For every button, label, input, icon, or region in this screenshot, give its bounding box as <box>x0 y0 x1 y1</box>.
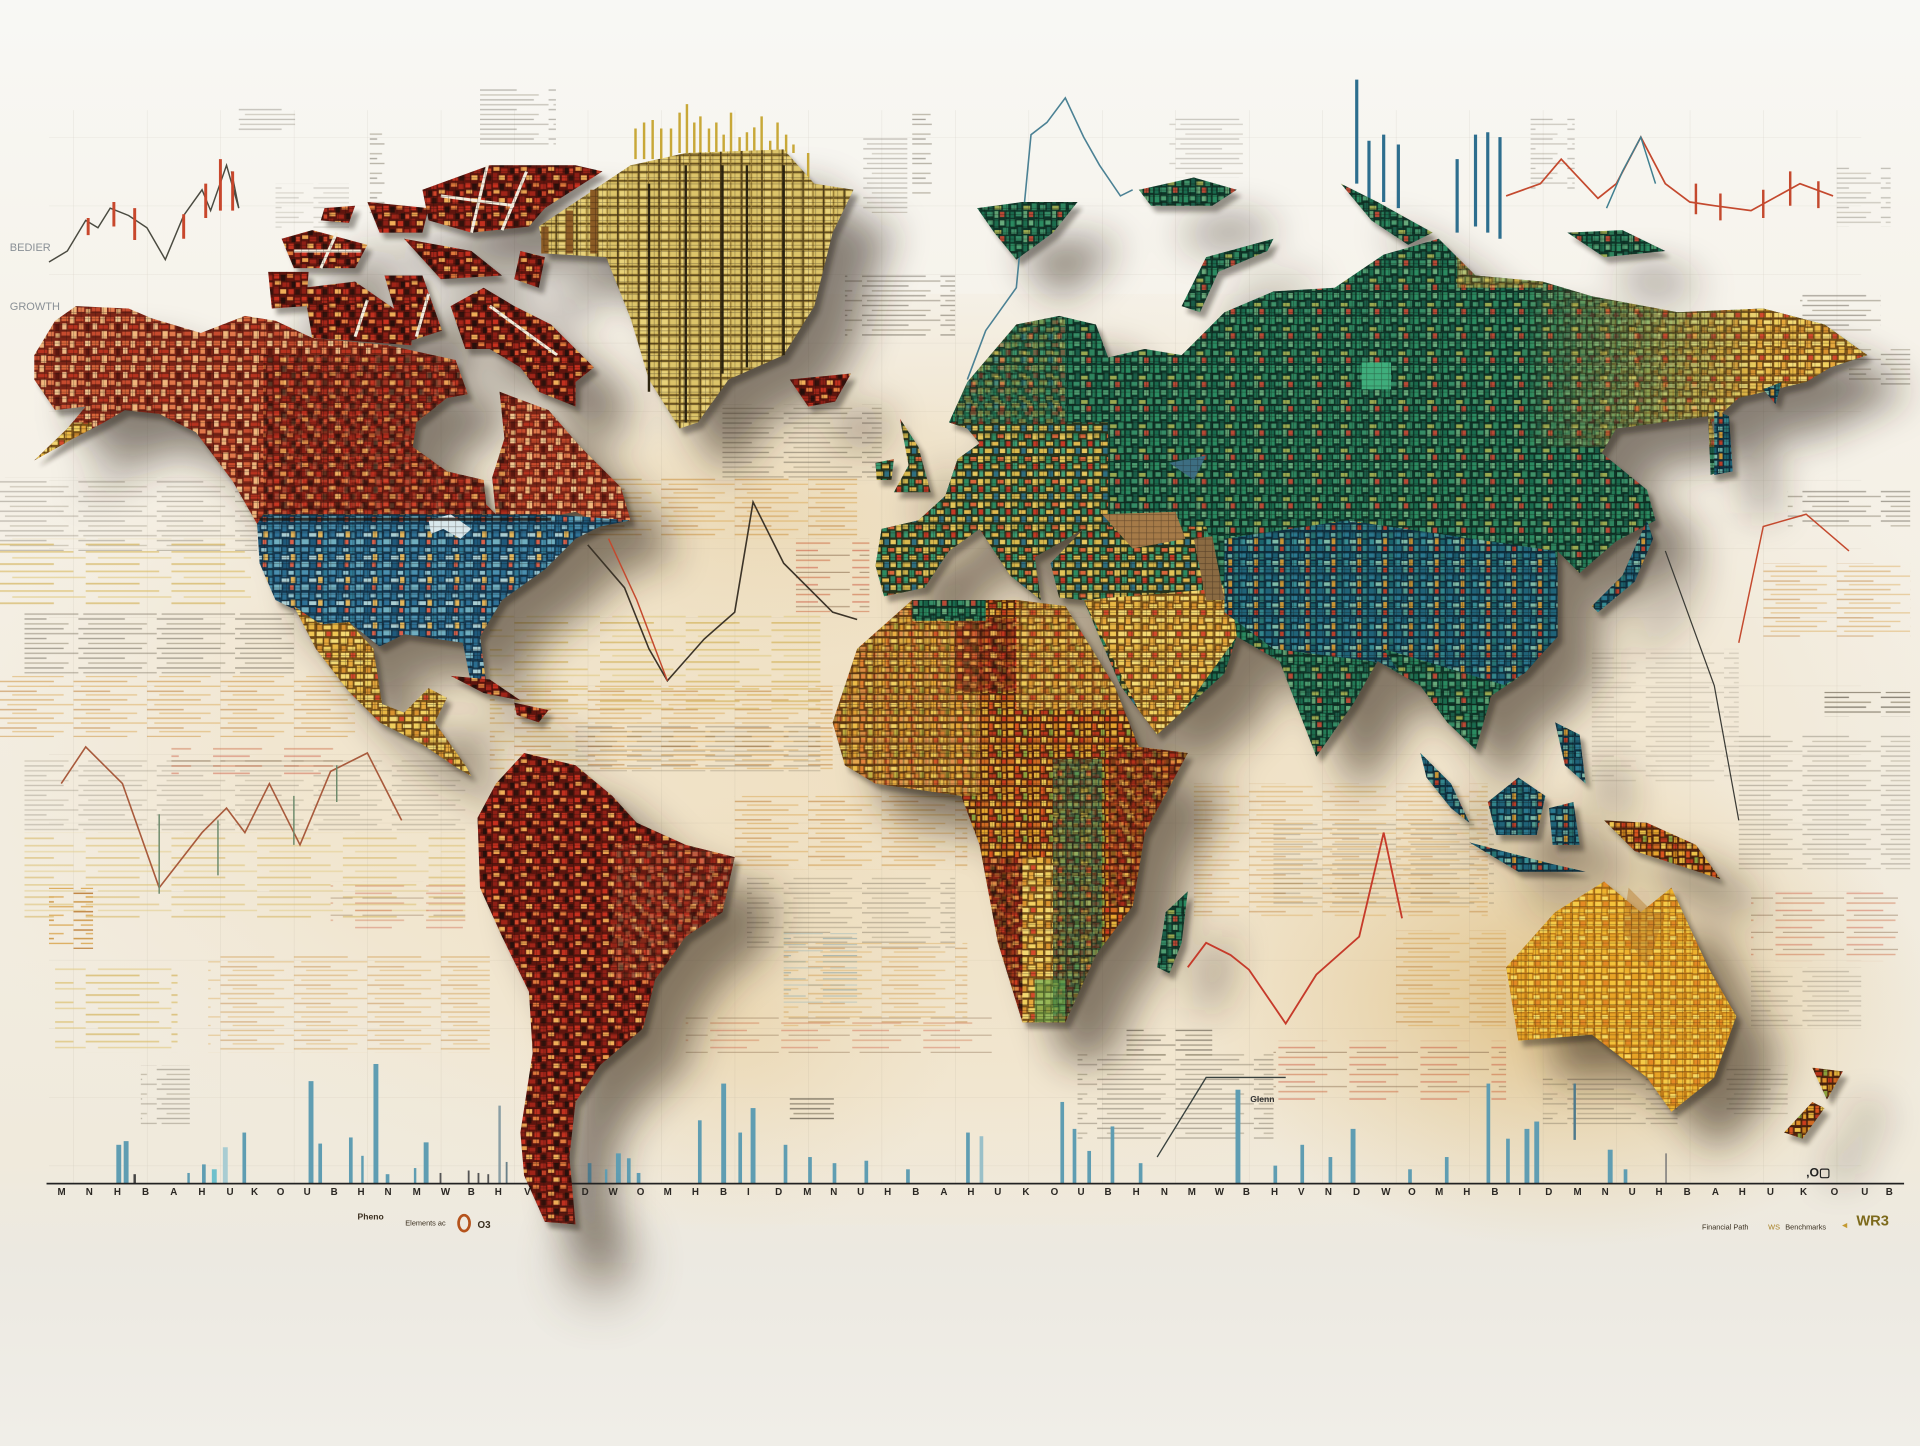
chart: top centre peak line <box>967 98 1133 380</box>
footer right note <box>1702 1214 1889 1231</box>
chart: top right trend <box>1357 80 1833 239</box>
line charts <box>49 80 1849 1157</box>
chart: mid Atlantic line <box>588 502 857 681</box>
footer right note: WS <box>1768 1222 1780 1231</box>
Greenland <box>539 104 853 429</box>
chart: top left candlestick trend <box>49 159 239 262</box>
Arctic islands of Eurasia <box>977 178 1665 312</box>
Africa <box>833 594 1194 1028</box>
axis tick labels: MNHBAHUKOUBHNMWBHVNDWOMHBIDMNUHBAHUKOUBHNMWBHVNDWOMHBIDMNUHBAHUKOUB <box>58 1187 1893 1198</box>
Eurasia <box>876 239 1886 759</box>
soft shadow under South America <box>568 1222 632 1300</box>
left margin labels: GROWTH <box>10 301 60 313</box>
left margin labels <box>10 242 60 313</box>
North America: Canada and Alaska <box>24 306 631 524</box>
chart: right side lines <box>1665 514 1849 820</box>
footer left note: O3 <box>478 1220 491 1231</box>
Caribbean islands <box>451 676 549 722</box>
left margin labels: BEDIER <box>10 242 51 254</box>
chart: lower right red trend <box>1188 833 1402 1024</box>
axis end label: ,O▢ <box>1806 1166 1831 1180</box>
chart annotation label: Glenn <box>1250 1094 1274 1104</box>
fine grid texture over land <box>34 149 1867 1224</box>
Iceland <box>790 373 851 406</box>
continent cast shadows <box>39 155 1909 1264</box>
continents <box>24 104 1886 1224</box>
footer right note: WR3 <box>1856 1214 1889 1230</box>
United States <box>257 514 631 692</box>
chart: left middle trend <box>61 747 402 894</box>
chart grid lines <box>49 110 1861 1184</box>
New Zealand <box>1784 1068 1843 1139</box>
New Guinea <box>1604 820 1720 879</box>
baseline axis <box>47 1183 1904 1184</box>
Australia <box>1506 882 1736 1112</box>
footer left note: Elements ac <box>405 1219 446 1228</box>
footer right note: Financial Path <box>1702 1222 1748 1231</box>
British Isles <box>876 419 931 492</box>
Mexico and Central America <box>294 606 471 776</box>
footer right note: ◄ <box>1840 1220 1849 1230</box>
footer left note <box>358 1211 491 1231</box>
footer right note: Benchmarks <box>1785 1222 1826 1231</box>
Black Sea and Caspian gaps <box>1102 455 1224 600</box>
South America <box>478 753 747 1224</box>
baseline bar chart <box>116 1064 1667 1184</box>
background text and data table blocks <box>0 88 1910 1139</box>
Canadian Arctic islands <box>268 165 602 406</box>
chart: annotation line <box>1157 1077 1286 1157</box>
footer left note: Pheno <box>358 1211 384 1221</box>
Madagascar <box>1157 891 1188 973</box>
Asian islands: Japan, Indonesia, Philippines, Sakhalin <box>1420 382 1782 872</box>
